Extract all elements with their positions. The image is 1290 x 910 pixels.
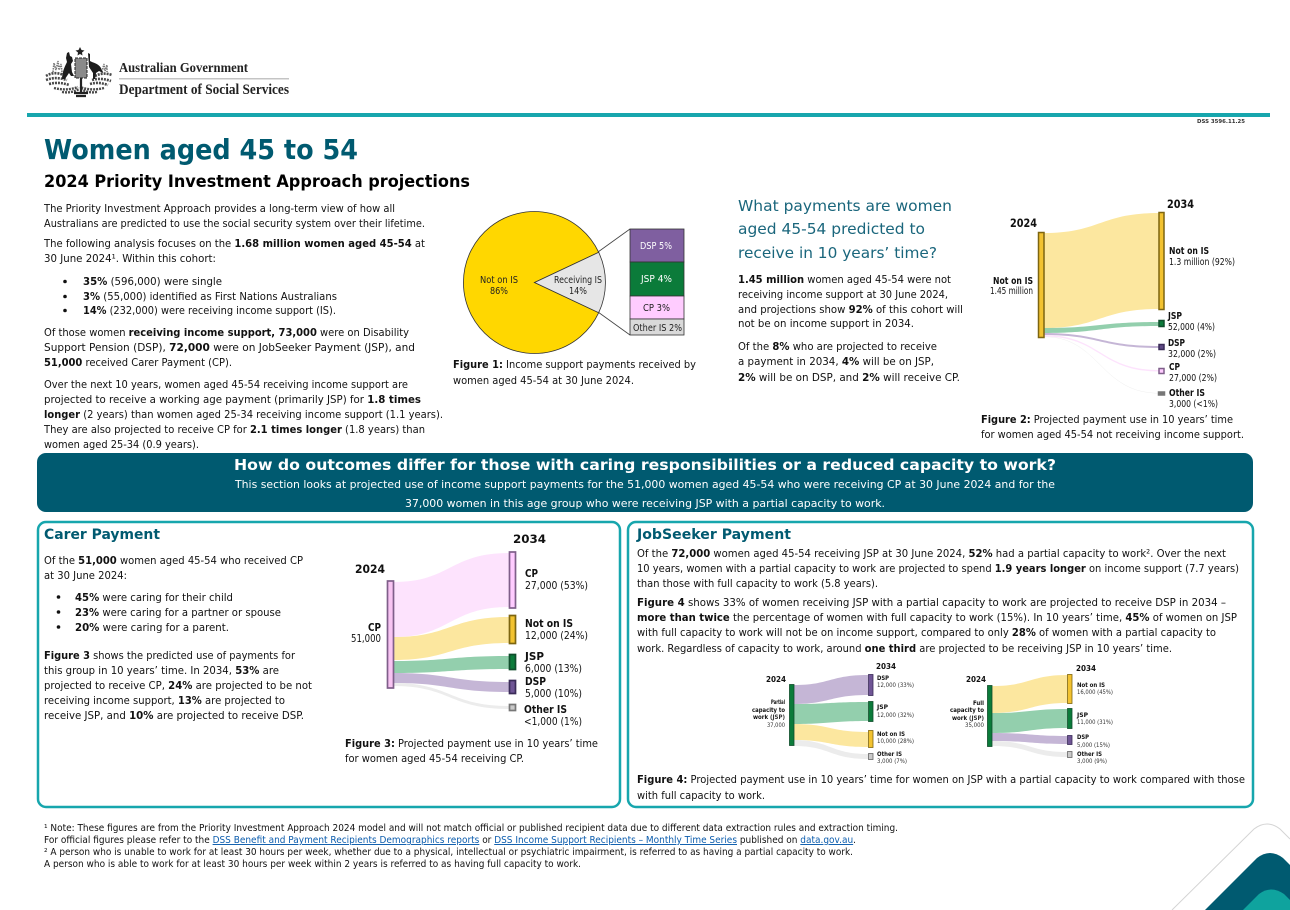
chart: figure 4 partial capacity sankey: JSP [876,705,889,711]
chart: figure 3 sankey: DSP [525,676,546,688]
chart: figure 1 pie of income support payments: Other IS 2% [633,323,682,334]
text block: introduction: Australians are predicted to use the social security system over their lifetime. [44,217,425,230]
chart: figure 3 sankey: 12,000 (24%) [525,630,588,642]
text block: carer findings: 20% were caring for a parent. [75,621,229,634]
text block: carer findings: at 30 June 2024: [44,569,127,582]
text block: carer findings: projected to receive CP, 24% are projected to be not [44,679,312,692]
chart: figure 4 full capacity sankey [950,664,1113,765]
panel frame [628,522,1253,807]
chart: figure 4 full capacity sankey: Full [973,701,984,707]
text block: introduction: 35% (596,000) were single [83,275,222,288]
chart: figure 2 sankey: JSP [1167,311,1182,322]
chart: figure 4 partial capacity sankey: DSP [877,676,890,682]
chart: figure 3 sankey: Other IS [524,704,567,716]
icon: coat of arms crest [46,47,112,96]
text block: carer findings: 45% were caring for their child [75,591,233,604]
text block: JobSeeker findings: than those with full capacity to work (5.8 years). [637,577,878,590]
text block: JobSeeker findings: work. Regardless of capacity to work, around one third are projected to be receiving JSP in 10 years’ time. [637,642,1172,655]
chart: figure 1 pie of income support payments: JSP 4% [640,274,672,285]
heading: what payments: aged 45-54 predicted to [738,220,925,238]
caption: figure 2: for women aged 45-54 not receiving income support. [981,428,1244,441]
text block: carer findings: receiving income support, 13% are projected to [44,694,285,707]
chart: figure 2 sankey: 27,000 (2%) [1169,373,1217,384]
chart: figure 4 partial capacity sankey: 37,000 [767,723,785,729]
panel: JobSeeker Payment [628,522,1253,807]
chart: figure 4 partial capacity sankey: 12,000 (33%) [877,683,914,689]
panel frame [38,522,620,807]
flows [394,553,509,709]
text block: what payments: 1.45 million women aged 45-54 were not [738,273,951,286]
chart: figure 4 full capacity sankey: 2024 [966,675,986,684]
text block: carer findings: this group in 10 years’ time. In 2034, 53% are [44,664,279,677]
text block: carer findings: Figure 3 shows the predicted use of payments for [44,649,296,662]
chart: figure 2 sankey: Not on IS [993,276,1033,287]
text block: carer findings: Of the 51,000 women aged 45-54 who received CP [44,554,303,567]
text block: what payments: and projections show 92% of this cohort will [738,303,963,316]
chart: figure 4 partial capacity sankey: Not on IS [877,732,905,738]
text block: introduction: longer (2 years) than women aged 25-34 receiving income support (1.1 years). [44,408,443,421]
caption: figure 3 [345,737,598,765]
chart: figure 4 partial capacity sankey: Partial [771,700,785,706]
text block: introduction [43,202,443,451]
chart: figure 3 sankey: 2034 [513,532,546,546]
caption: figure 1 [453,358,697,387]
banner: caring responsibilities section: How do outcomes differ for those with caring responsibilities or a reduced capacity to work? [234,456,1056,474]
chart: figure 3 sankey: Not on IS [525,618,573,630]
chart: figure 1 pie of income support payments [463,212,684,354]
chart: figure 4 full capacity sankey: 5,000 (15%) [1077,743,1110,749]
footnotes: A person who is able to work for at least 30 hours per week within 2 years is referred to as having full capacity to work. [44,859,581,870]
chart: figure 3 sankey: CP [368,622,381,634]
chart: figure 3 sankey [351,532,588,728]
chart: figure 2 sankey: 1.3 million (92%) [1169,257,1235,268]
chart: figure 4 full capacity sankey: 2034 [1076,664,1096,673]
caption: figure 2 [981,413,1244,441]
text block: what payments: 2% will be on DSP, and 2% will receive CP. [738,371,960,384]
pie slice: receiving IS 14% [534,252,605,313]
heading: what payments [738,197,952,262]
banner: caring responsibilities section: 37,000 women in this age group who were receiving JSP with a partial capacity to work. [405,497,885,510]
text block: introduction: Support Pension (DSP), 72,000 were on JobSeeker Payment (JSP), and [44,341,415,354]
chart: figure 1 pie of income support payments: Receiving IS [554,275,602,286]
chart: figure 2 sankey: 1.45 million [990,286,1033,297]
banner: caring responsibilities section: This section looks at projected use of income support payments for the 51,000 women aged 45-54 who were receiving CP at 30 June 2024 and for the [234,478,1055,491]
chart: figure 1 pie of income support payments: DSP 5% [640,241,672,252]
Australian Government wordmark: Australian Government [119,61,248,76]
chart: figure 4 partial capacity sankey: Other IS [877,752,902,758]
text block: introduction: 3% (55,000) identified as First Nations Australians [83,290,337,303]
caption: figure 4: with full capacity to work. [637,789,765,802]
flows [794,675,868,759]
footnotes: ¹ Note: These figures are from the Priority Investment Approach 2024 model and will not match official or published recipient data due to different data extraction rules and extraction timing. [44,823,898,834]
heading: what payments: receive in 10 years’ time? [738,244,937,262]
document code: DSS 3596.11.25 [1197,119,1245,125]
chart: figure 2 sankey: 2024 [1010,216,1037,230]
text block: introduction: Of those women receiving income support, 73,000 were on Disability [44,326,410,339]
chart: figure 2 sankey: 3,000 (<1%) [1169,399,1218,410]
nodes [988,674,1072,758]
heading: Carer Payment: Carer Payment [44,527,160,543]
caption: figure 3: Figure 3: Projected payment use in 10 years’ time [345,737,598,750]
caption: figure 1: women aged 45-54 at 30 June 2024. [453,374,634,387]
pie slice: not on IS 86% [463,212,599,354]
header rule [27,113,1270,117]
text block: introduction: 14% (232,000) were receiving income support (IS). [83,304,336,317]
connector lines [598,229,630,335]
text block: what payments: a payment in 2034, 4% will be on JSP, [738,355,934,368]
corner decoration [1172,824,1290,910]
chart: figure 1 pie of income support payments: Not on IS [480,275,518,286]
chart: figure 4 partial capacity sankey: 2034 [876,662,896,671]
text block: introduction: projected to receive a working age payment (primarily JSP) for 1.8 times [44,393,421,406]
chart: figure 1 pie of income support payments: 86% [490,286,508,297]
chart: figure 3 sankey: 51,000 [351,633,381,645]
caption: figure 4 [637,773,1245,802]
chart: figure 3 sankey: 27,000 (53%) [525,580,588,592]
chart: figure 4 partial capacity sankey: capacity to [752,708,785,714]
text block: introduction: Over the next 10 years, women aged 45-54 receiving income support are [44,378,408,391]
chart: figure 2 sankey: 52,000 (4%) [1168,322,1215,333]
chart: figure 4 partial capacity sankey: 2024 [766,675,786,684]
title: Women aged 45 to 54 [44,133,358,166]
chart: figure 4 full capacity sankey: DSP [1077,735,1090,741]
chart: figure 4 partial capacity sankey: 10,000 (28%) [877,739,914,745]
chart: figure 4 full capacity sankey: 3,000 (9%) [1077,759,1107,765]
chart: figure 4 full capacity sankey: 16,000 (45%) [1077,690,1113,696]
chart: figure 1 pie of income support payments: 14% [569,286,587,297]
chart: figure 4 full capacity sankey: capacity to [950,708,984,714]
heading: what payments: What payments are women [738,197,952,215]
footnotes [44,823,898,870]
text block: JobSeeker findings: 10 years, women with a partial capacity to work are projected to spend 1.9 years longer on income support (7.7 years) [637,562,1239,575]
caption: figure 3: for women aged 45-54 receiving CP. [345,752,524,765]
text block: JobSeeker findings: more than twice the percentage of women with full capacity to work (15%). In 10 years’ time, 45% of women on JSP [637,611,1237,624]
nodes [1038,212,1164,395]
chart: figure 4 full capacity sankey: work (JSP) [952,716,984,722]
text block: JobSeeker findings: Figure 4 shows 33% of women receiving JSP with a partial capacity to work are projected to receive DSP in 2034 – [637,596,1226,609]
banner: caring responsibilities section [37,453,1253,512]
chart: figure 4 partial capacity sankey [752,662,914,765]
footnotes: ² A person who is unable to work for at least 30 hours per week, whether due to a physical, intellectual or psychiatric impairment, is referred to as having a partial capacity to work. [44,847,853,858]
chart: figure 4 partial capacity sankey: 3,000 (7%) [877,759,907,765]
caption: figure 2: Figure 2: Projected payment use in 10 years’ time [981,413,1233,426]
chart: figure 2 sankey [990,197,1235,410]
caption: figure 1: Figure 1: Income support payments received by [453,358,697,371]
chart: figure 1 pie of income support payments: CP 3% [643,303,670,314]
chart: figure 2 sankey: Not on IS [1169,246,1209,257]
chart: figure 2 sankey: DSP [1168,338,1185,349]
nodes [790,674,873,760]
text block: JobSeeker findings [637,547,1239,655]
text block: JobSeeker findings: Of the 72,000 women aged 45-54 receiving JSP at 30 June 2024, 52% had a partial capacity to work². Over the next [637,547,1226,560]
chart: figure 2 sankey: 32,000 (2%) [1168,349,1216,360]
chart: figure 2 sankey: CP [1169,362,1180,373]
chart: figure 3 sankey: 6,000 (13%) [525,663,582,675]
text block: introduction: They are also projected to receive CP for 2.1 times longer (1.8 years) than [43,423,425,436]
Department of Social Services wordmark: Department of Social Services [119,82,289,98]
chart: figure 4 partial capacity sankey: 12,000 (32%) [877,713,914,719]
chart: figure 4 full capacity sankey: 35,000 [965,723,984,729]
logo: Australian Government Department of Social Services [46,47,289,98]
text block: carer findings [44,554,312,722]
chart: figure 4 full capacity sankey: Other IS [1077,752,1102,758]
chart: figure 3 sankey: JSP [524,651,544,663]
footnotes: For official figures please refer to the DSS Benefit and Payment Recipients Demographics reports or DSS Income Support Recipients – Monthly Time Series published on data.gov.au. [44,835,856,846]
flows [992,675,1067,757]
text block: what payments: receiving income support at 30 June 2024, [738,288,948,301]
panel: Carer Payment [38,522,620,807]
text block: carer findings: 23% were caring for a partner or spouse [75,606,281,619]
text block: carer findings: receive JSP, and 10% are projected to receive DSP. [44,709,304,722]
chart: figure 4 full capacity sankey: 11,000 (31%) [1077,720,1113,726]
text block: what payments: not be on income support in 2034. [738,317,914,330]
chart: figure 3 sankey: <1,000 (1%) [524,716,582,728]
chart: figure 3 sankey: CP [525,568,538,580]
chart: figure 3 sankey: 5,000 (10%) [525,688,582,700]
chart: figure 2 sankey: 2034 [1167,197,1194,211]
text block: what payments: Of the 8% who are projected to receive [738,340,937,353]
chart: figure 4 partial capacity sankey: work (JSP) [753,715,785,721]
text block: introduction: women aged 25-34 (0.9 years). [44,438,199,451]
heading: JobSeeker Payment: JobSeeker Payment [636,527,791,543]
text block: JobSeeker findings: with full capacity to work will not be on income support, compared to only 28% of women with a partial capacity to [637,626,1216,639]
stacked bar: receiving IS breakdown [630,229,684,335]
chart: figure 3 sankey: 2024 [355,562,385,576]
text block: introduction: The following analysis focuses on the 1.68 million women aged 45-54 at [43,237,425,250]
chart: figure 4 full capacity sankey: Not on IS [1077,683,1105,689]
text block: what payments [738,273,963,384]
text block: introduction: 30 June 2024¹. Within this cohort: [44,252,216,265]
flows [1044,213,1159,394]
subtitle: 2024 Priority Investment Approach projections [44,172,470,191]
text block: introduction: 51,000 received Carer Payment (CP). [44,356,232,369]
text block: introduction: The Priority Investment Approach provides a long-term view of how all [43,202,395,215]
chart: figure 2 sankey: Other IS [1169,388,1205,399]
chart: figure 4 full capacity sankey: JSP [1076,713,1089,719]
caption: figure 4: Figure 4: Projected payment use in 10 years’ time for women on JSP with a partial capacity to work compared with those [637,773,1245,786]
nodes [388,552,516,710]
